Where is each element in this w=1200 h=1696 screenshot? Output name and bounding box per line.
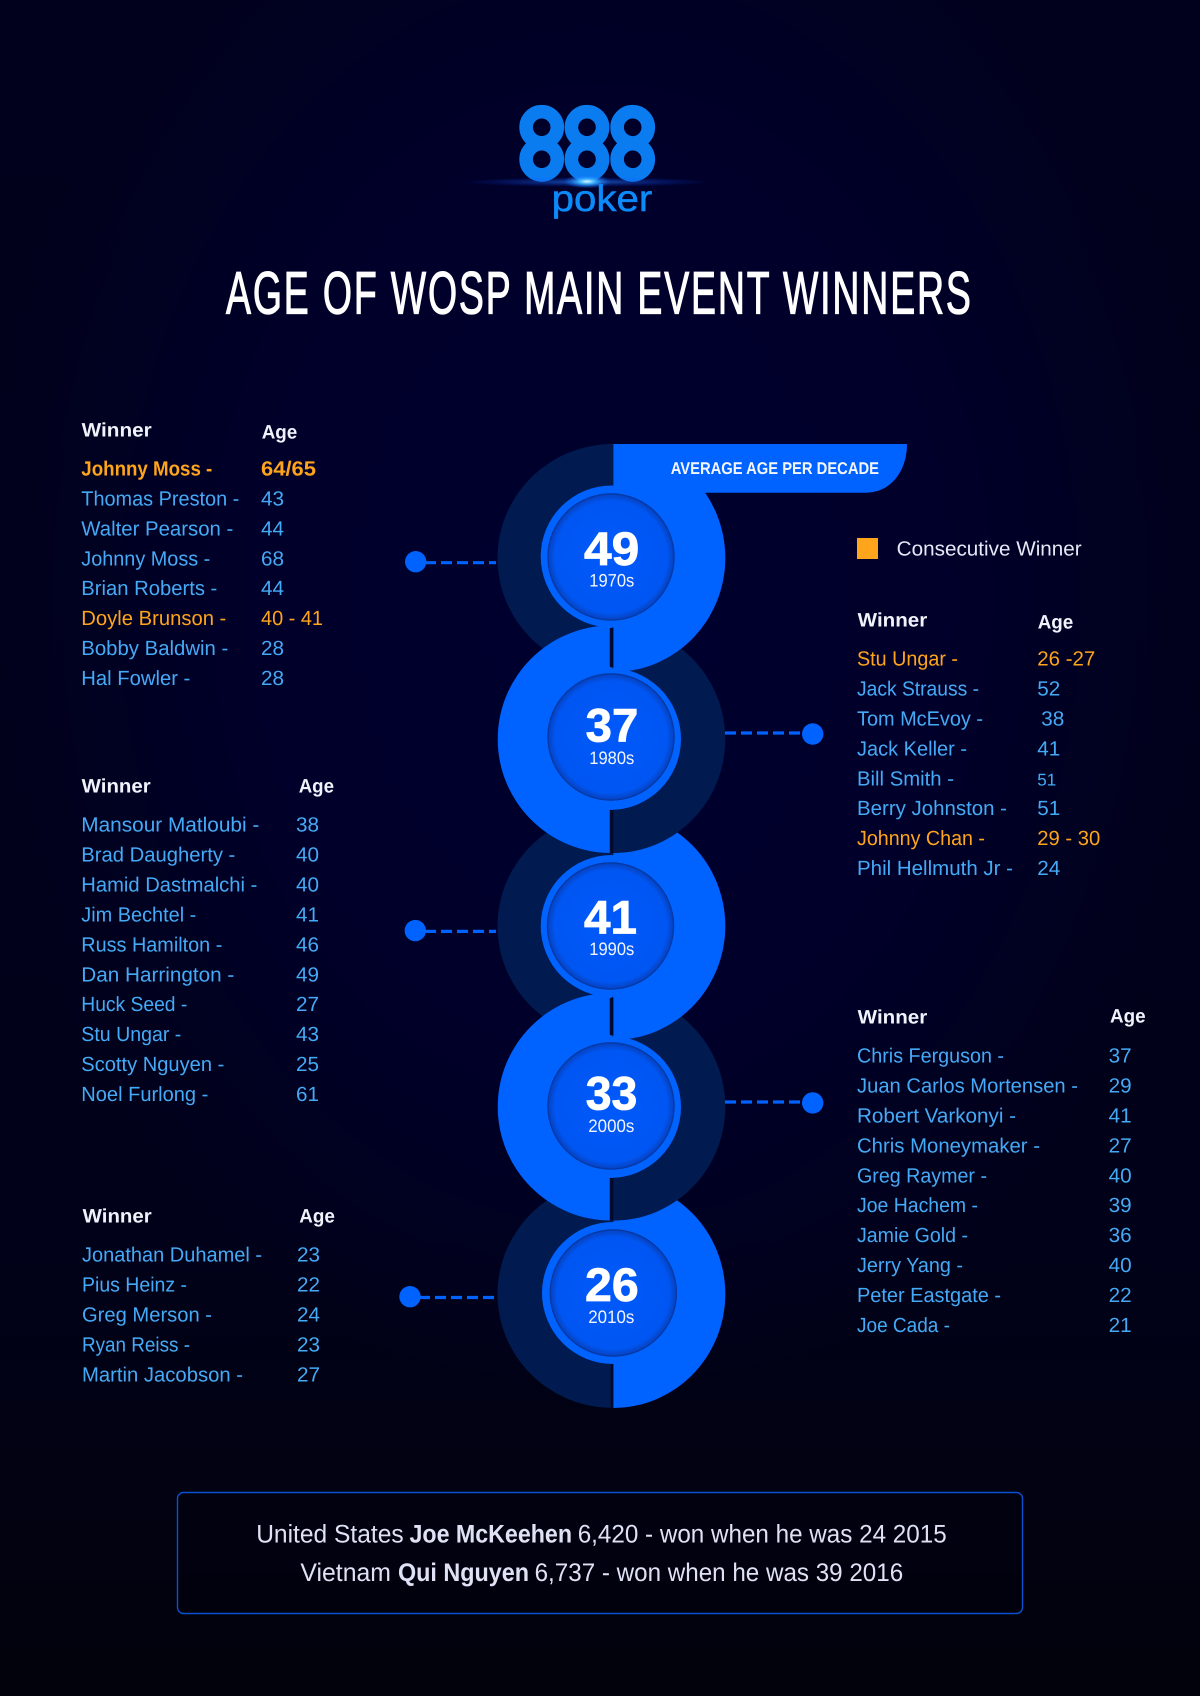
column headers: [858, 610, 1073, 633]
rows: 43: [296, 1023, 319, 1046]
rows: Jonathan Duhamel -: [82, 1244, 262, 1267]
rows: 52: [1037, 678, 1060, 701]
rows: 28: [261, 667, 284, 690]
rows: 61: [296, 1083, 319, 1106]
callout line 1: 6,420 - won when he was 24 2015: [578, 1521, 947, 1549]
node: 2010s: 26: [585, 1258, 639, 1311]
column headers: [82, 420, 297, 443]
right half: 2000s: [613, 993, 725, 1221]
rows: 22: [297, 1274, 320, 1297]
rows: 37: [1109, 1045, 1132, 1068]
rows: Peter Eastgate -: [857, 1284, 1001, 1307]
rows: Thomas Preston -: [81, 488, 239, 511]
node: 1980s: 37: [586, 699, 638, 752]
dark left halves: [498, 444, 613, 1408]
node: 1990s: 41: [584, 890, 637, 944]
rows: Juan Carlos Mortensen -: [857, 1075, 1078, 1098]
right half: 2010s: [613, 1180, 725, 1408]
rows: Johnny Moss -: [81, 548, 210, 571]
center separators: [610, 628, 613, 1408]
rows: Chris Moneymaker -: [857, 1135, 1040, 1158]
rows: Jerry Yang -: [857, 1254, 963, 1277]
rows: Joe Cada -: [857, 1314, 950, 1337]
rows: 40: [1109, 1254, 1132, 1277]
rows: [81, 458, 323, 690]
legend label: Consecutive Winner: [897, 538, 1082, 561]
rows: Jim Bechtel -: [81, 904, 196, 927]
rows: 49: [296, 964, 319, 987]
legend swatch: [857, 538, 878, 559]
right half and banner: 1970s: [613, 444, 907, 672]
node: 2010s: [542, 1222, 684, 1364]
callout: recent winners: [178, 1492, 1022, 1614]
rows: Tom McEvoy -: [857, 708, 983, 731]
rows: Stu Ungar -: [81, 1023, 181, 1046]
callout line 1: United States: [256, 1521, 404, 1549]
column headers: Winner: [83, 1205, 152, 1227]
rows: 44: [261, 577, 284, 600]
rows: 41: [1037, 738, 1060, 761]
rows: 40: [1109, 1165, 1132, 1188]
rows: Walter Pearson -: [81, 518, 233, 541]
rows: Russ Hamilton -: [81, 934, 222, 957]
column headers: [82, 775, 334, 797]
right half: 1990s: [613, 812, 725, 1040]
rows: 39: [1109, 1194, 1132, 1217]
rows: 40: [296, 874, 319, 897]
rows: Johnny Moss -: [81, 458, 212, 481]
node: 1990s: 1990s: [589, 939, 634, 959]
rows: 64/65: [261, 458, 316, 481]
column headers: [83, 1205, 335, 1227]
rows: Doyle Brunson -: [81, 607, 226, 630]
table: 2010s winners: [82, 1205, 335, 1387]
callout line 2: [300, 1559, 903, 1587]
node: 1980s: 1980s: [589, 748, 634, 768]
rows: Noel Furlong -: [81, 1083, 208, 1106]
rows: 26 -27: [1037, 648, 1095, 671]
callout line 2: 6,737 - won when he was 39 2016: [535, 1559, 903, 1587]
rows: 40: [296, 844, 319, 867]
table: 1990s winners: [81, 775, 334, 1106]
callout line 1: [256, 1521, 947, 1549]
rows: [857, 1045, 1132, 1337]
node: 2000s: 2000s: [588, 1116, 634, 1136]
column headers: Winner: [82, 420, 152, 442]
rows: 22: [1109, 1284, 1132, 1307]
rows: Bill Smith -: [857, 768, 954, 791]
rows: 36: [1109, 1224, 1132, 1247]
connector: 1980s: [725, 723, 823, 745]
callout frame: [178, 1492, 1022, 1614]
rows: Pius Heinz -: [82, 1274, 187, 1297]
rows: [81, 814, 319, 1106]
rows: 38: [1041, 708, 1064, 731]
rows: 27: [296, 993, 319, 1016]
rows: 43: [261, 488, 284, 511]
right half: 1980s: [613, 625, 725, 853]
rows: Phil Hellmuth Jr -: [857, 857, 1013, 880]
rows: 27: [1109, 1135, 1132, 1158]
rows: Huck Seed -: [81, 993, 187, 1016]
rows: Robert Varkonyi -: [857, 1105, 1016, 1128]
node: 2000s: [539, 1036, 681, 1178]
chart: interlocking decade rings: [498, 444, 907, 1408]
column headers: Winner: [82, 775, 151, 797]
column headers: Age: [1038, 611, 1073, 633]
rows: 68: [261, 548, 284, 571]
callout line 1: Joe McKeehen: [410, 1521, 572, 1549]
rows: [857, 648, 1100, 880]
node: 1970s: 49: [584, 522, 639, 575]
rows: Brad Daugherty -: [81, 844, 235, 867]
rows: Jamie Gold -: [857, 1224, 968, 1247]
legend: consecutive winner: [857, 538, 1082, 561]
table: 1970s winners: [81, 420, 323, 690]
column headers: Age: [1110, 1006, 1146, 1028]
node: 2010s: 2010s: [588, 1307, 634, 1327]
rows: Johnny Chan -: [857, 827, 985, 850]
column headers: [858, 1006, 1146, 1028]
rows: 29 - 30: [1037, 827, 1100, 850]
rows: Martin Jacobson -: [82, 1364, 243, 1387]
rows: Hamid Dastmalchi -: [81, 874, 257, 897]
rows: Brian Roberts -: [81, 577, 217, 600]
column headers: Winner: [858, 610, 928, 632]
rows: 23: [297, 1244, 320, 1267]
connector: 1970s: [405, 551, 496, 572]
rows: Greg Merson -: [82, 1304, 212, 1327]
rows: 21: [1109, 1314, 1132, 1337]
rows: Dan Harrington -: [81, 964, 234, 987]
rows: 25: [296, 1053, 319, 1076]
logo: 888 poker: [462, 112, 712, 219]
rows: 51: [1037, 771, 1056, 790]
banner label: AVERAGE AGE PER DECADE: [671, 459, 879, 478]
rows: Hal Fowler -: [81, 667, 190, 690]
table: 2000s winners: [857, 1006, 1146, 1337]
rows: Greg Raymer -: [857, 1165, 987, 1188]
rows: Berry Johnston -: [857, 797, 1007, 820]
connector: 2010s: [399, 1286, 498, 1307]
node: 2000s: 33: [586, 1066, 637, 1119]
rows: 44: [261, 518, 284, 541]
rows: 23: [297, 1334, 320, 1357]
rows: 28: [261, 637, 284, 660]
column headers: Age: [299, 1205, 335, 1227]
rows: 41: [1109, 1105, 1132, 1128]
rows: 40 - 41: [261, 607, 323, 630]
rows: Jack Keller -: [857, 738, 967, 761]
rows: Mansour Matloubi -: [81, 814, 259, 837]
icon: logo glow: [462, 174, 712, 188]
table: 1980s winners: [857, 610, 1100, 880]
rows: Bobby Baldwin -: [81, 637, 228, 660]
logo wordmark: poker: [552, 178, 652, 219]
rows: 41: [296, 904, 319, 927]
column headers: Age: [299, 775, 334, 797]
icon: 888 rings: [526, 112, 648, 175]
column headers: Age: [262, 421, 297, 443]
column headers: Winner: [858, 1006, 928, 1028]
node: 1970s: 1970s: [589, 571, 634, 591]
rows: 38: [296, 814, 319, 837]
callout line 2: Qui Nguyen: [398, 1559, 529, 1587]
node: 1970s: [541, 486, 683, 628]
rows: [82, 1244, 320, 1387]
node: 1980s: [539, 668, 681, 810]
connector: 1990s: [405, 920, 496, 941]
rows: 46: [296, 934, 319, 957]
rows: Ryan Reiss -: [82, 1334, 190, 1357]
rows: Scotty Nguyen -: [81, 1053, 224, 1076]
rows: Chris Ferguson -: [857, 1045, 1004, 1068]
rows: Stu Ungar -: [857, 648, 958, 671]
rows: Joe Hachem -: [857, 1194, 978, 1217]
rows: 29: [1109, 1075, 1132, 1098]
callout line 2: Vietnam: [300, 1559, 391, 1587]
rows: 51: [1037, 797, 1060, 820]
blue left halves: [498, 625, 612, 1221]
connector: 2000s: [725, 1092, 823, 1114]
rows: 24: [297, 1304, 320, 1327]
rows: 24: [1037, 857, 1060, 880]
node: 1990s: [541, 855, 683, 997]
rows: Jack Strauss -: [857, 678, 979, 701]
rows: 27: [297, 1364, 320, 1387]
